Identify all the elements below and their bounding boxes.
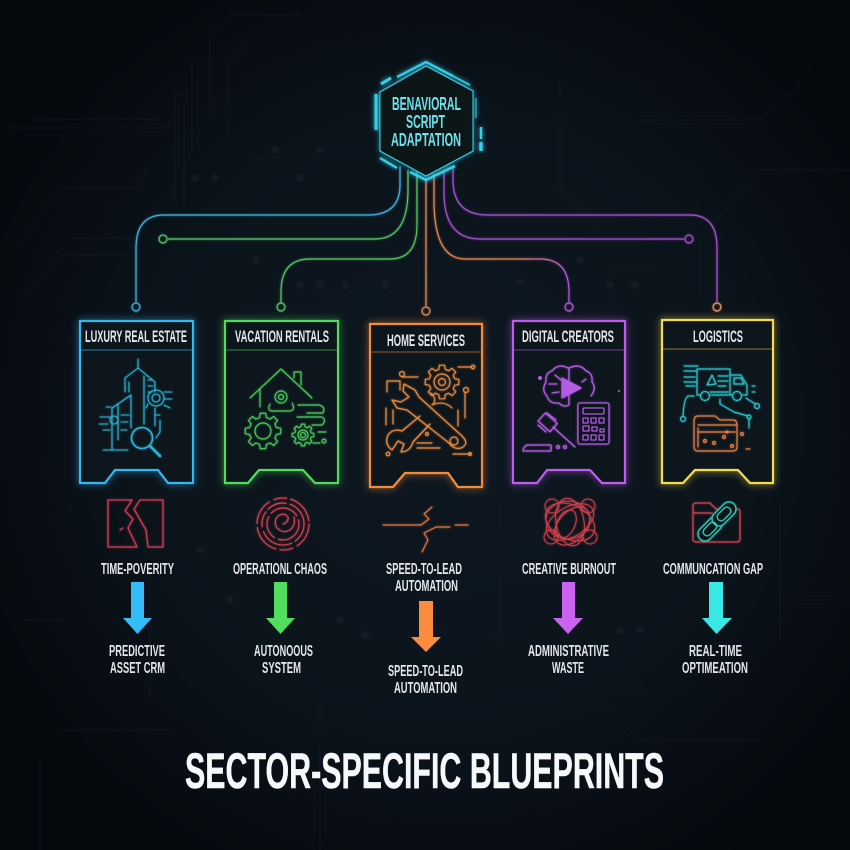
arrow: teal <box>702 582 732 634</box>
arrow: orange <box>411 601 441 652</box>
text: autonomous system: SYSTEM <box>262 660 301 677</box>
text: administrative waste: ADMINISTRATIVE <box>528 643 609 660</box>
text: real-time optimization: OPTIMEATION <box>682 660 748 677</box>
icon: skyscraper with magnifier <box>99 359 172 456</box>
text: administrative waste <box>528 643 609 677</box>
faint background dots <box>191 146 644 639</box>
hexagon frame <box>376 62 481 180</box>
connector: digital creators <box>434 174 573 311</box>
connector: logistics <box>453 168 721 311</box>
card frame <box>80 321 193 483</box>
icon: delivery truck <box>680 366 760 428</box>
connector: green branch <box>159 170 408 243</box>
text: time-poverity: TIME-POVERITY <box>101 561 174 578</box>
icon: house with gears <box>245 369 326 449</box>
text: creative burnout: CREATIVE BURNOUT <box>522 561 616 578</box>
arrow: green <box>266 582 295 634</box>
text: autonomous system: AUTONOOUS <box>254 643 313 660</box>
card frame <box>513 321 625 483</box>
icon: folder <box>694 416 750 451</box>
icon: brain, gavel and calculator <box>523 366 609 451</box>
icon: chaos spiral <box>257 498 309 550</box>
card frame <box>225 321 338 483</box>
hexagon node: behavioral script adaptation <box>376 62 481 180</box>
text: speed-to-lead automation problem: AUTOMATION <box>395 578 458 595</box>
connector lines <box>132 166 721 315</box>
text: predictive asset crm: PREDICTIVE <box>109 643 165 660</box>
text: autonomous system <box>254 643 313 677</box>
card title: LUXURY REAL ESTATE <box>85 328 187 346</box>
connector: purple branch <box>444 170 693 243</box>
card title: DIGITAL CREATORS <box>522 328 614 346</box>
text: real-time optimization: REAL-TIME <box>689 643 742 660</box>
arrow: blue <box>123 582 152 634</box>
text: speed-to-lead automation solution: AUTOMATION <box>394 680 457 697</box>
icon: folder with chain link <box>693 499 740 544</box>
text: predictive asset crm <box>109 643 165 677</box>
card frame <box>370 324 482 487</box>
arrow: purple <box>553 582 583 634</box>
text: predictive asset crm: ASSET CRM <box>110 660 165 677</box>
text: communication gap: COMMUNCATION GAP <box>663 561 763 578</box>
hexagon label: BENAVIORAL <box>392 94 461 114</box>
text: speed-to-lead automation solution <box>388 663 463 697</box>
connector: vacation rentals <box>277 172 417 311</box>
panel: luxury real estate <box>80 321 193 483</box>
panel: digital creators <box>513 321 625 483</box>
hexagon label: SCRIPT <box>406 112 445 132</box>
text: real-time optimization <box>682 643 748 677</box>
icon: broken line <box>383 507 468 552</box>
card title: LOGISTICS <box>693 328 743 346</box>
panel: logistics <box>662 320 773 483</box>
text: speed-to-lead automation problem <box>386 561 462 595</box>
card title: VACATION RENTALS <box>235 328 329 346</box>
decorative nodes <box>538 376 620 392</box>
panel: vacation rentals <box>225 321 338 483</box>
text: speed-to-lead automation solution: SPEED-TO-LEAD <box>388 663 463 680</box>
text: administrative waste: WASTE <box>552 660 584 677</box>
text: speed-to-lead automation problem: SPEED-TO-LEAD <box>386 561 462 578</box>
text: operational chaos: OPERATIONL CHAOS <box>233 561 327 578</box>
card title: HOME SERVICES <box>387 332 465 350</box>
hexagon label <box>391 94 461 150</box>
icon: cracked square <box>108 500 163 547</box>
connector: luxury real estate <box>132 166 400 311</box>
icon: wrench and gear <box>386 365 475 456</box>
connector: home services <box>422 178 430 315</box>
card frame <box>662 320 773 483</box>
hexagon label: ADAPTATION <box>391 130 461 150</box>
icon: tangled scribble <box>539 496 601 552</box>
panel: home services <box>370 324 482 487</box>
